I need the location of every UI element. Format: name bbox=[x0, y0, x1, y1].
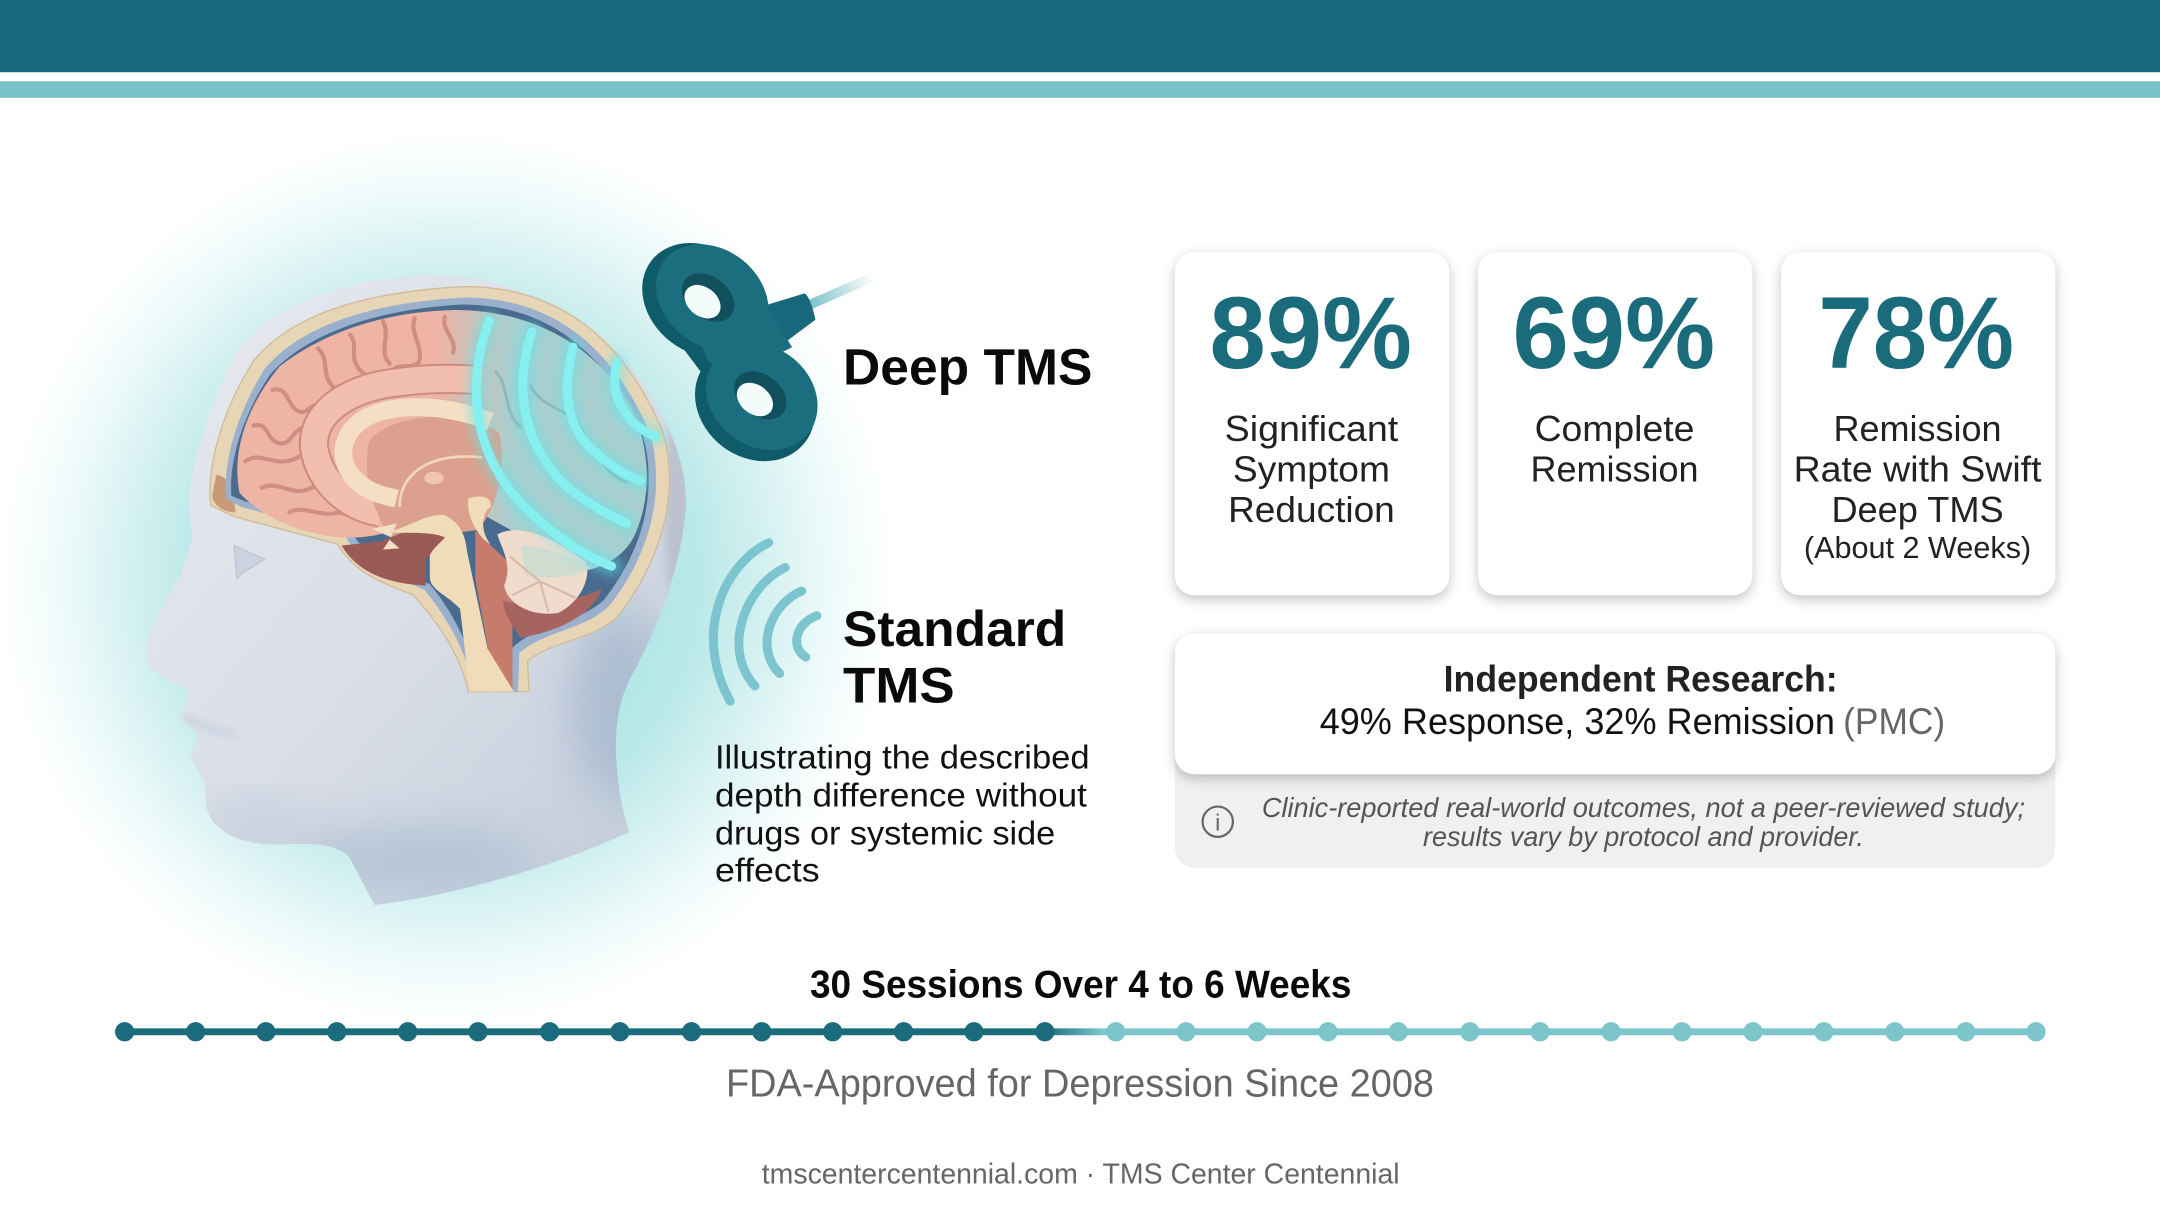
lower cerebellum bbox=[503, 590, 602, 638]
skull band bbox=[210, 287, 669, 692]
completed session dots bbox=[115, 1022, 1055, 1041]
brainstem bbox=[387, 515, 514, 692]
label: Standard TMS: Standard bbox=[843, 600, 1066, 657]
lips bbox=[185, 716, 236, 734]
corpus callosum bbox=[343, 407, 490, 499]
cerebrum bbox=[237, 310, 647, 572]
head shading bbox=[200, 413, 692, 894]
timeline heading: 30 Sessions Over 4 to 6 Weeks bbox=[810, 963, 1351, 1006]
panel: stat 78%: Rate with Swift bbox=[1794, 449, 2042, 489]
membrane layer bbox=[226, 298, 656, 692]
diencephalon bbox=[367, 417, 502, 540]
thalamus bbox=[424, 472, 444, 484]
panel: independent research: 49% Response, 32% Remission bbox=[1320, 700, 1835, 742]
panel: stat 69% bbox=[1478, 252, 1752, 595]
top header band bbox=[0, 0, 2160, 98]
coil handle bbox=[755, 293, 816, 344]
cerebellum bbox=[497, 530, 590, 614]
fluid space bbox=[231, 304, 649, 692]
optic structures bbox=[372, 523, 399, 550]
panel: independent research: (PMC) bbox=[1843, 700, 1945, 742]
eye bbox=[234, 546, 264, 579]
frontal base bbox=[342, 523, 449, 585]
footer source: tmscentercentennial.com · TMS Center Centennial bbox=[762, 1157, 1400, 1189]
head silhouette bbox=[146, 275, 686, 905]
gyri folds bbox=[245, 317, 454, 518]
panel: stat 89%: Symptom bbox=[1233, 449, 1390, 489]
timeline: 30 sessions track bbox=[115, 1022, 2046, 1041]
remaining session dots bbox=[1106, 1022, 2046, 1041]
description text: drugs or systemic side bbox=[715, 815, 1055, 852]
panel: stat 78%: Deep TMS bbox=[1831, 490, 2004, 530]
description text: effects bbox=[715, 853, 820, 890]
panel: stat 89%: Reduction bbox=[1228, 490, 1395, 530]
icon: figure-8 coil bbox=[619, 219, 873, 485]
background glow behind head bbox=[0, 131, 895, 1026]
panel: independent research: Independent Research: bbox=[1444, 658, 1838, 700]
panel: stat 78%: 78% bbox=[1818, 276, 2014, 390]
coil cable bbox=[807, 277, 873, 306]
panel: stat 89%: Significant bbox=[1225, 409, 1398, 449]
note text: Clinic-reported real-world outcomes, not a peer-reviewed study; bbox=[1262, 792, 2025, 823]
icon: info bbox=[1203, 807, 1233, 837]
coil face bbox=[635, 222, 839, 472]
panel: stat 89%: 89% bbox=[1209, 276, 1412, 390]
illustration: head with brain cross-section bbox=[146, 275, 692, 905]
label: Standard TMS bbox=[843, 600, 1066, 714]
panel: stat 78% bbox=[1781, 252, 2055, 595]
coil side bbox=[619, 219, 838, 485]
rear stem area bbox=[475, 530, 529, 692]
cingulate gyrus bbox=[314, 379, 482, 512]
description text: Illustrating the described bbox=[715, 740, 1090, 777]
label: Standard TMS: TMS bbox=[843, 657, 955, 714]
panel: stat 89% bbox=[1175, 252, 1449, 595]
FDA statement: FDA-Approved for Depression Since 2008 bbox=[726, 1063, 1434, 1106]
panel: stat 69%: 69% bbox=[1513, 276, 1715, 390]
frontal sinus bbox=[212, 475, 236, 512]
note text: results vary by protocol and provider. bbox=[1423, 821, 1864, 852]
coil holes bbox=[673, 263, 744, 332]
note text bbox=[1262, 792, 2025, 852]
panel: note box bbox=[1175, 730, 2055, 868]
panel: stat 78%: (About 2 Weeks) bbox=[1804, 532, 2031, 565]
panel: stat 69%: Remission bbox=[1530, 449, 1699, 489]
icon: info: i bbox=[1215, 810, 1220, 836]
panel: stat 78%: Remission bbox=[1834, 409, 2002, 449]
panel: stat 69%: Complete bbox=[1535, 409, 1694, 449]
label: Deep TMS: Deep TMS bbox=[843, 338, 1092, 395]
description text: depth difference without bbox=[715, 778, 1087, 815]
description text bbox=[715, 740, 1090, 890]
deep TMS waves bbox=[476, 321, 656, 566]
icon: standard TMS waves bbox=[713, 543, 817, 701]
panel: independent research bbox=[1175, 634, 2055, 774]
